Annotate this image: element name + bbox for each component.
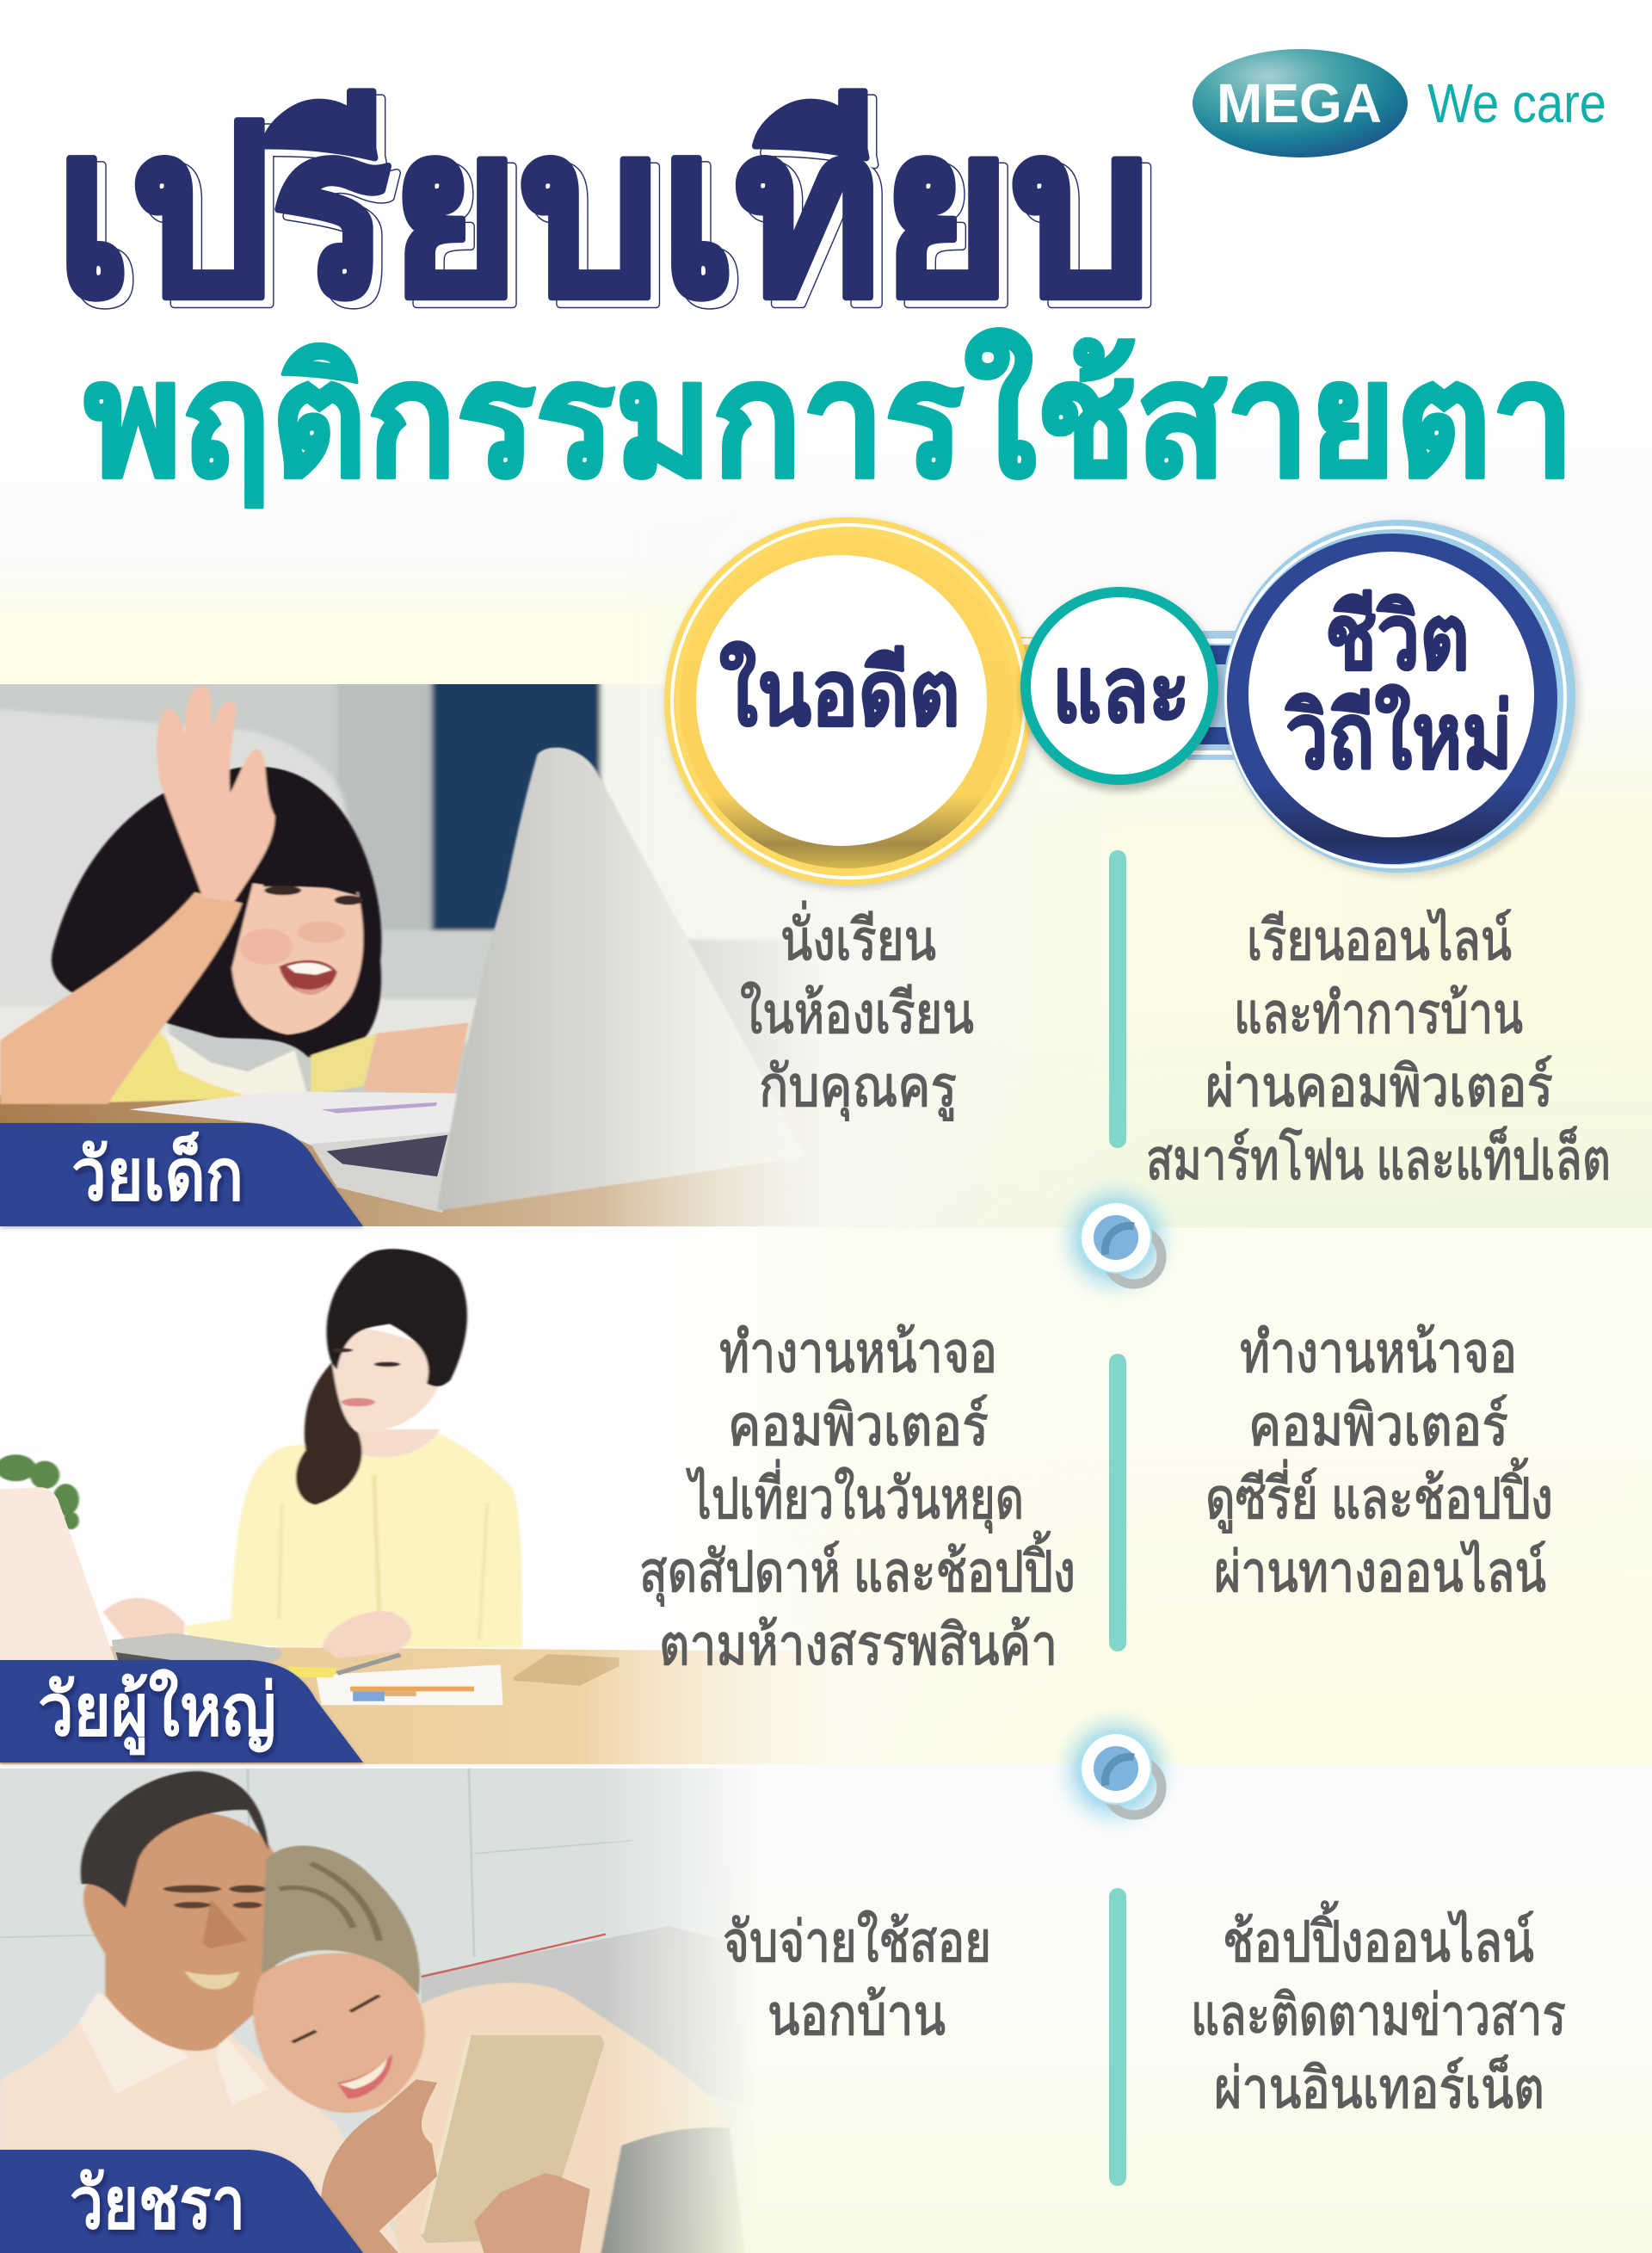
row 2 text: past: ไปเที่ยวในวันหยุด bbox=[686, 1460, 1024, 1534]
logo tagline: We care bbox=[1427, 72, 1606, 134]
row 3 text: past: จับจ่ายใช้สอย bbox=[723, 1910, 991, 1973]
row 2 text: past: คอมพิวเตอร์ bbox=[728, 1393, 989, 1457]
row 3 text: past bbox=[723, 1910, 991, 2046]
row 1 divider bbox=[1109, 850, 1126, 1148]
row 2 text: new normal bbox=[1205, 1320, 1553, 1603]
collar and dress bbox=[108, 1032, 245, 1103]
logo oval bbox=[1193, 49, 1408, 157]
label: life: ชีวิต bbox=[1325, 587, 1470, 688]
circle: past bbox=[664, 517, 1034, 888]
row 2 text: new normal: ดูซีรี่ย์ และช้อปปิ้ง bbox=[1205, 1458, 1553, 1534]
title line 1: เปรียบเทียบ bbox=[64, 89, 1160, 350]
logo: MEGA We care bbox=[1193, 49, 1606, 157]
arm and raised hand bbox=[0, 892, 243, 1104]
row 2 tab: adults bbox=[0, 1660, 363, 1762]
logo wordmark: MEGA bbox=[1217, 72, 1382, 134]
woman blouse bbox=[369, 1983, 730, 2253]
row 2 text: past: ทำงานหน้าจอ bbox=[719, 1320, 997, 1384]
row 1 text: past: ในห้องเรียน bbox=[740, 981, 974, 1045]
photo: older couple with tablet bbox=[0, 1766, 948, 2253]
row 2 text: past bbox=[639, 1320, 1076, 1676]
row 3 tab: seniors bbox=[0, 2150, 363, 2253]
row 2 text: new normal: ผ่านทางออนไลน์ bbox=[1214, 1540, 1546, 1603]
row 3 text: new normal: ช้อปปิ้งออนไลน์ bbox=[1223, 1901, 1534, 1973]
row 1 text: new normal: และทำการบ้าน bbox=[1234, 981, 1523, 1045]
sleeve cuff bbox=[601, 2127, 745, 2253]
desk items bbox=[316, 1664, 503, 1705]
row 2 tab: adults: วัยผู้ใหญ่ bbox=[38, 1669, 276, 1756]
row 3 text: past: นอกบ้าน bbox=[767, 1983, 946, 2046]
row 1 text: past: นั่งเรียน bbox=[780, 901, 936, 972]
row 3 text: new normal bbox=[1191, 1901, 1566, 2120]
row 1 text: past: กับคุณครู bbox=[759, 1054, 957, 1121]
row separator dot 1 bbox=[1052, 1176, 1180, 1303]
paper and laptop bbox=[129, 1091, 459, 1147]
row 2 text: past: ตามห้างสรรพสินค้า bbox=[659, 1613, 1057, 1676]
label: and: และ bbox=[1052, 639, 1190, 741]
title line 1: เปรียบเทียบ bbox=[64, 89, 1160, 350]
hands bbox=[323, 1611, 411, 1658]
label: new way: วิถีใหม่ bbox=[1285, 684, 1513, 787]
title line 1: เปรียบเทียบ bbox=[55, 82, 1151, 343]
hair bbox=[327, 1249, 467, 1386]
row 2 text: past: สุดสัปดาห์ และช้อปปิ้ง bbox=[639, 1531, 1076, 1607]
row 3 text: new normal: ผ่านอินเทอร์เน็ต bbox=[1214, 2054, 1544, 2120]
circle: new normal bbox=[1223, 520, 1580, 876]
plant bbox=[0, 1454, 79, 1529]
laptop bbox=[112, 1633, 281, 1663]
title line 2: พฤติกรรมการใช้สายตา bbox=[84, 329, 1575, 509]
row 3 tab: seniors: วัยชรา bbox=[70, 2163, 245, 2244]
man shirt bbox=[0, 1992, 405, 2253]
row 2 text: new normal: ทำงานหน้าจอ bbox=[1240, 1320, 1517, 1384]
hands bbox=[321, 2079, 437, 2253]
row 3 divider bbox=[1109, 1888, 1126, 2186]
cardigan bbox=[184, 1433, 522, 1648]
connectors between circles bbox=[1007, 631, 1248, 760]
face bbox=[332, 1328, 445, 1431]
photo: woman working at desk bbox=[0, 1226, 795, 1764]
hair bbox=[52, 767, 381, 1059]
photo: child raising hand at laptop bbox=[0, 684, 793, 1226]
row 1 tab: children: วัยเด็ก bbox=[71, 1131, 243, 1215]
row 1 text: new normal bbox=[1146, 908, 1611, 1191]
row separator dot 2 bbox=[1052, 1707, 1180, 1834]
face bbox=[231, 883, 363, 1034]
man head bbox=[83, 1812, 285, 2051]
row 2 divider bbox=[1109, 1354, 1126, 1651]
circle: and bbox=[1021, 591, 1221, 791]
background bbox=[0, 571, 1652, 2253]
tablet bbox=[421, 2035, 604, 2243]
row 1 text: past bbox=[740, 901, 974, 1121]
row 2 text: new normal: คอมพิวเตอร์ bbox=[1248, 1393, 1508, 1457]
row 1 text: new normal: เรียนออนไลน์ bbox=[1247, 908, 1512, 972]
row 1 text: new normal: ผ่านคอมพิวเตอร์ bbox=[1205, 1054, 1553, 1118]
row 1 tab: children bbox=[0, 1123, 363, 1226]
label: in the past: ในอดีต bbox=[719, 641, 960, 744]
woman head bbox=[253, 1954, 425, 2113]
